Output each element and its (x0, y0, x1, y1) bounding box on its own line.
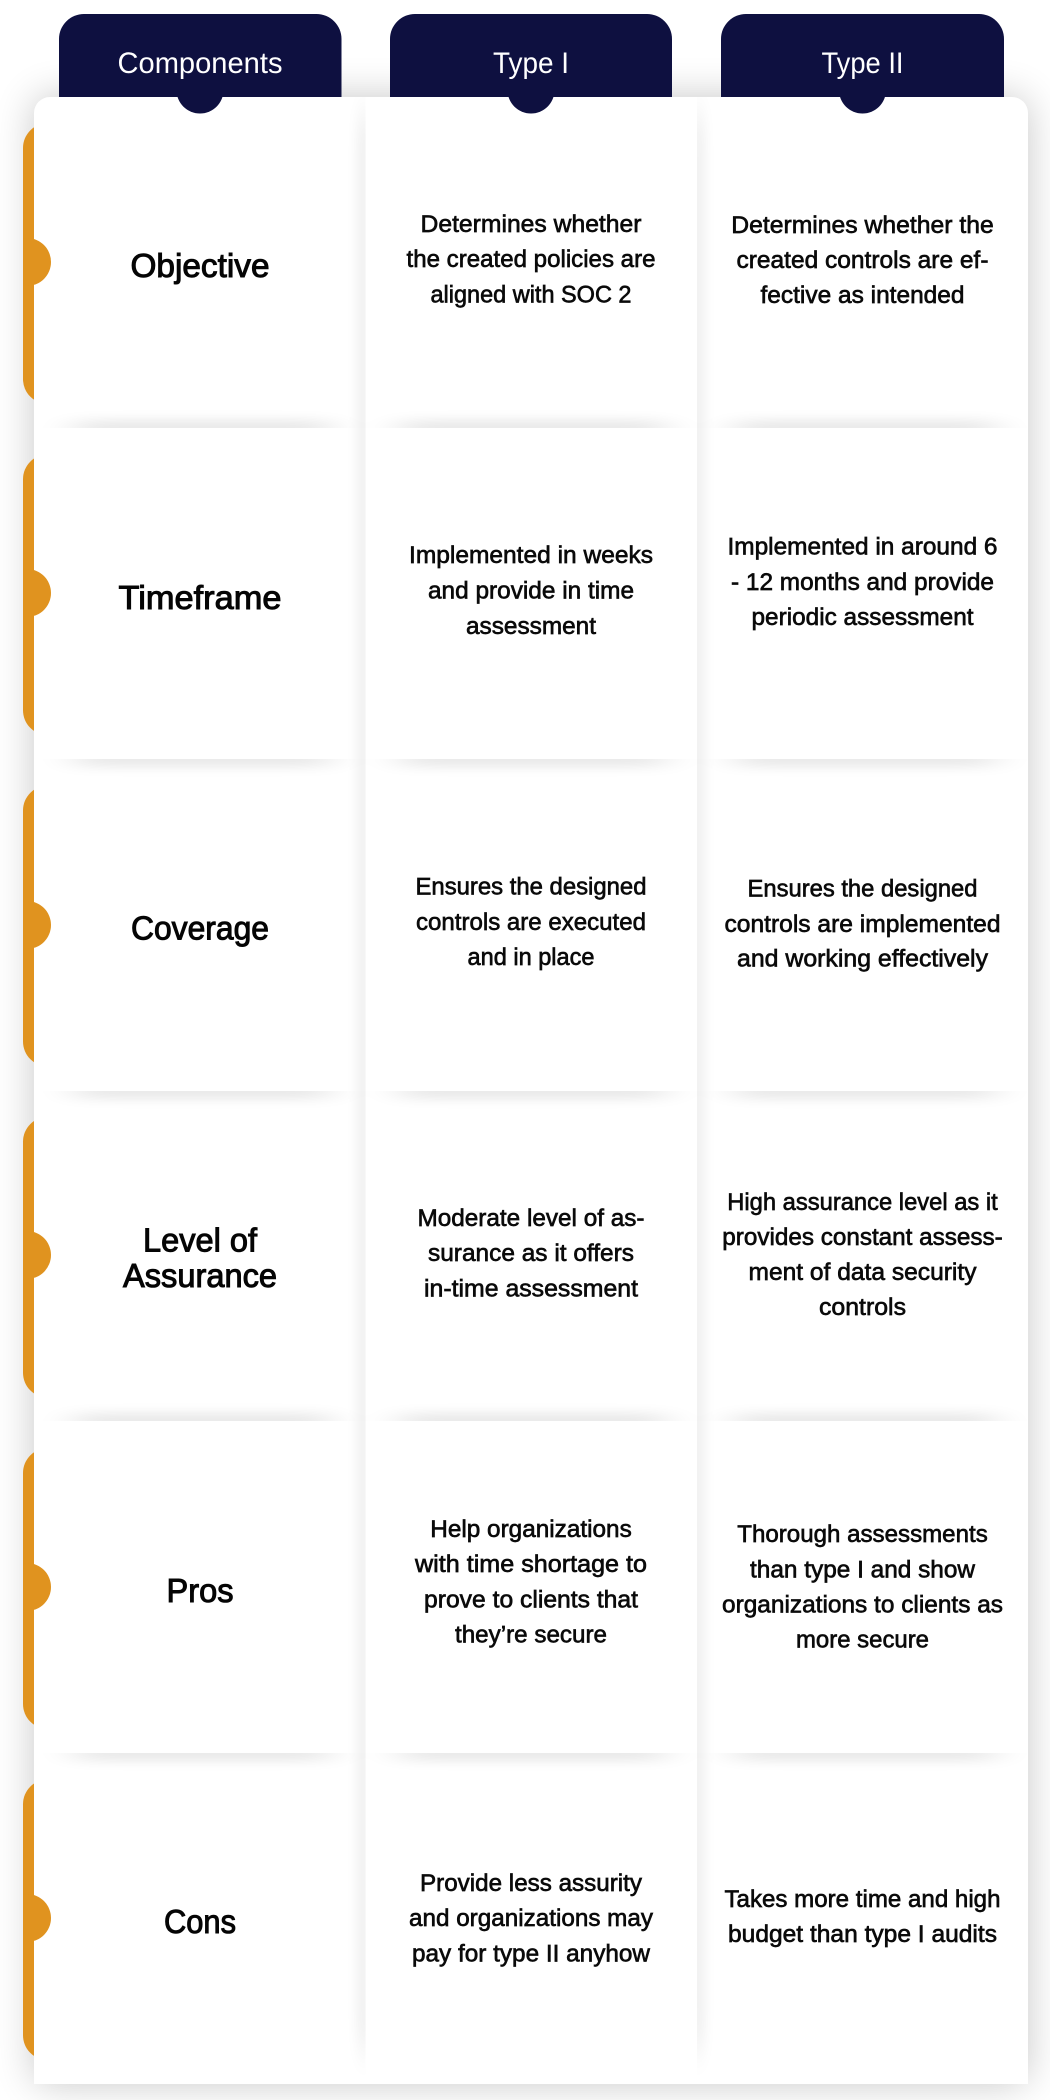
Type I: Level of Assurance: in-time assessment (424, 1276, 638, 1302)
header tab: Components: Components (118, 47, 282, 80)
Type II: Level of Assurance: High assurance level as it (727, 1189, 998, 1216)
Type II: Cons (724, 1886, 1000, 1948)
row: Timeframe (118, 534, 998, 640)
row: Coverage (131, 874, 1000, 972)
header tab: Type I (390, 14, 672, 100)
Type I: Cons: Provide less assurity (420, 1870, 642, 1897)
Type I: Pros: prove to clients that (424, 1586, 638, 1614)
Type II: Level of Assurance: controls (819, 1294, 906, 1321)
component label: Objective: Objective (130, 247, 270, 284)
Type II: Level of Assurance (722, 1189, 1003, 1321)
Type I: Objective (406, 211, 656, 308)
header tab: Type II: Type II (822, 47, 904, 80)
Type II: Pros: more secure (796, 1626, 929, 1654)
Type II: Coverage: Ensures the designed (748, 876, 978, 902)
component label: Level of Assurance: Assurance (123, 1257, 277, 1294)
Type I: Timeframe: assessment (466, 613, 596, 640)
row: Cons (164, 1870, 1000, 1968)
component label: Timeframe: Timeframe (118, 579, 282, 616)
Type II: Timeframe: - 12 months and provide (731, 569, 994, 596)
Type I: Objective: Determines whether (420, 211, 642, 238)
header nubs (178, 97, 885, 114)
orange side bars (23, 123, 83, 2060)
Type II: Coverage (724, 876, 1000, 972)
Type II: Pros (722, 1521, 1003, 1654)
Type I: Pros: Help organizations (430, 1516, 632, 1543)
Type I: Coverage: Ensures the designed (416, 874, 646, 900)
Type I: Pros (414, 1516, 647, 1648)
Type II: Pros: organizations to clients as (722, 1592, 1003, 1618)
Type I: Coverage (416, 874, 646, 971)
Type II: Timeframe: Implemented in around 6 (728, 534, 998, 560)
header tab: Components (59, 14, 342, 100)
component label: Level of Assurance (123, 1222, 277, 1294)
Type II: Objective (731, 212, 994, 309)
Type II: Objective: fective as intended (760, 282, 964, 309)
Type I: Pros: with time shortage to (414, 1551, 647, 1578)
Type II: Timeframe: periodic assessment (752, 604, 974, 631)
Type II: Pros: than type I and show (750, 1556, 976, 1584)
component label: Coverage: Coverage (131, 910, 269, 946)
Type II: Objective: Determines whether the (731, 212, 994, 239)
Type II: Level of Assurance: provides constant assess- (722, 1224, 1003, 1251)
Type I: Timeframe: and provide in time (428, 578, 634, 604)
orange row markers (34, 239, 51, 1941)
Type I: Objective: aligned with SOC 2 (430, 282, 632, 308)
Type II: Timeframe (728, 534, 998, 631)
component label: Cons: Cons (164, 1903, 236, 1940)
Type I: Objective: the created policies are (406, 246, 656, 273)
row: Level of Assurance (123, 1189, 1003, 1321)
Type I: Timeframe (409, 542, 653, 640)
Type II: Level of Assurance: ment of data security (748, 1259, 976, 1286)
header tab: Type II (721, 14, 1004, 100)
Type I: Level of Assurance (418, 1205, 644, 1302)
Type I: Coverage: and in place (468, 944, 594, 971)
Type II: Cons: budget than type I audits (728, 1921, 997, 1948)
Type I: Level of Assurance: Moderate level of as- (418, 1205, 644, 1232)
component label: Pros: Pros (166, 1572, 234, 1609)
Type I: Cons: pay for type II anyhow (412, 1940, 651, 1968)
row: Objective (130, 211, 994, 309)
Type I: Coverage: controls are executed (416, 909, 646, 936)
row: Pros (166, 1516, 1003, 1654)
Type II: Coverage: controls are implemented (724, 911, 1000, 938)
Type II: Objective: created controls are ef- (736, 247, 988, 274)
Type I: Cons (409, 1870, 653, 1968)
Type I: Pros: they’re secure (455, 1622, 607, 1648)
header tab: Type I: Type I (493, 47, 569, 80)
Type II: Coverage: and working effectively (737, 946, 988, 972)
Type I: Cons: and organizations may (409, 1905, 653, 1932)
Type II: Cons: Takes more time and high (724, 1886, 1000, 1913)
Type I: Level of Assurance: surance as it offers (428, 1240, 634, 1267)
Type I: Timeframe: Implemented in weeks (409, 542, 653, 569)
component label: Level of Assurance: Level of (143, 1222, 258, 1258)
Type II: Pros: Thorough assessments (737, 1521, 988, 1548)
